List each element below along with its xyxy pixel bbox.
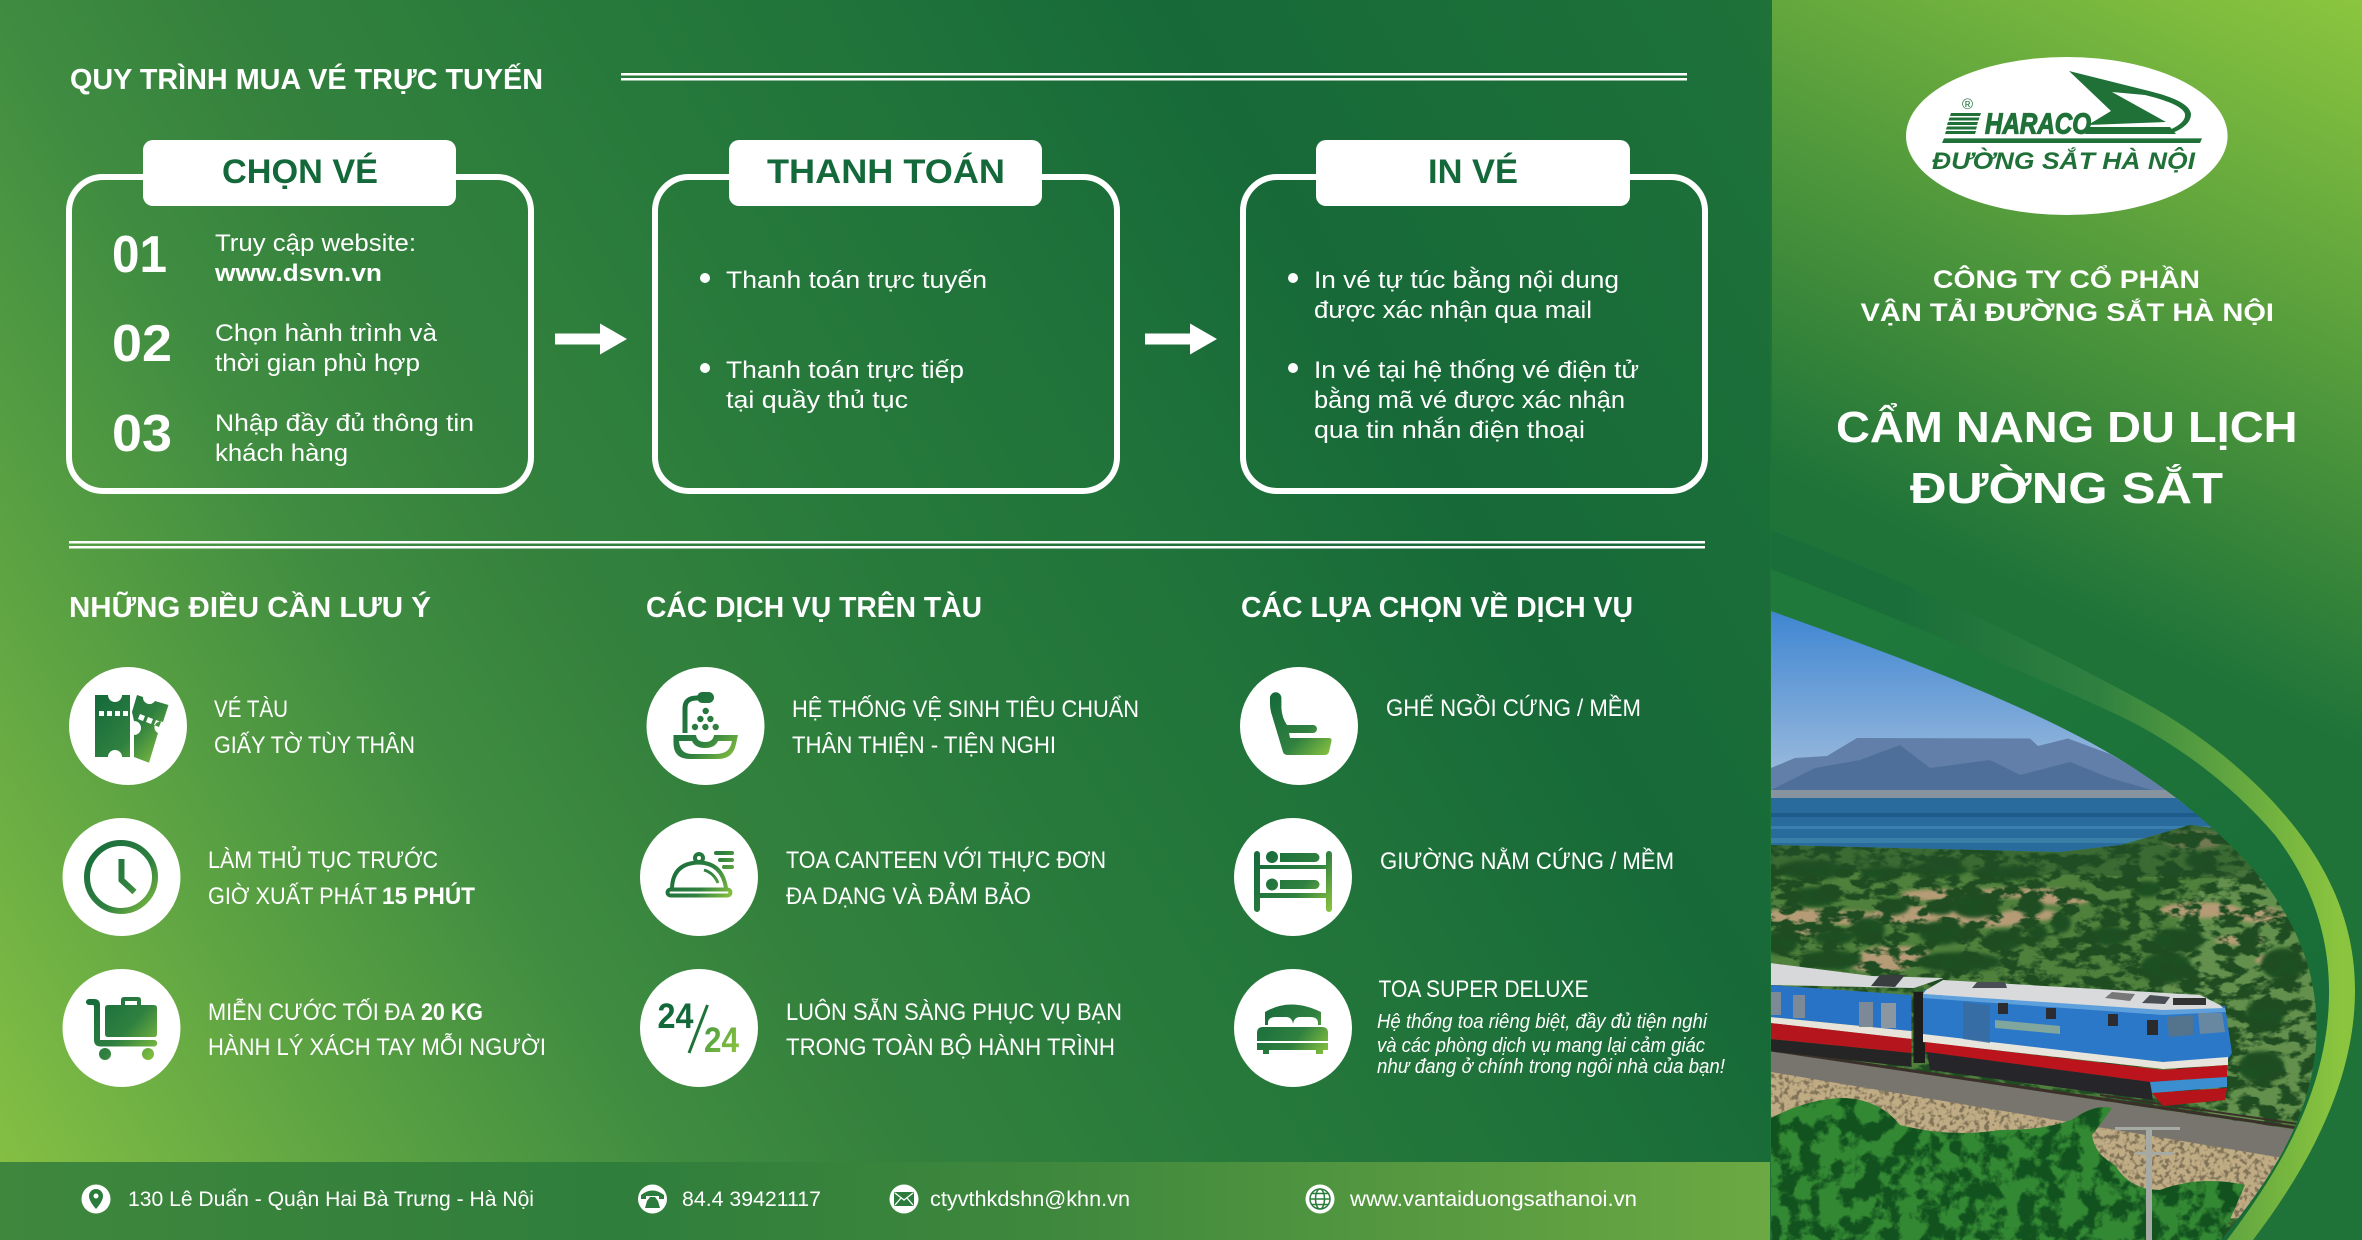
coastal land xyxy=(1771,825,2317,1240)
heading: onboard services: CÁC DỊCH VỤ TRÊN TÀU xyxy=(646,590,982,624)
dark tree clumps xyxy=(1764,853,2305,1083)
company name xyxy=(1860,264,2274,327)
item: hygiene: THÂN THIỆN - TIỆN NGHI xyxy=(792,732,1056,759)
icon: tickets xyxy=(95,695,168,763)
step box: choose ticket xyxy=(69,140,531,491)
icon: seat xyxy=(1270,692,1332,755)
tab: payment: THANH TOÁN xyxy=(767,153,1005,191)
footer: contact bar xyxy=(0,1162,1771,1240)
item: berths: GIƯỜNG NẰM CỨNG / MỀM xyxy=(1380,847,1674,875)
tab: print ticket xyxy=(1316,140,1630,206)
item: 24/24 service: LUÔN SẴN SÀNG PHỤC VỤ BẠN xyxy=(786,998,1122,1026)
item: ticket and ID: VÉ TÀU xyxy=(214,696,288,723)
contact: email: ctyvthkdshn@khn.vn xyxy=(930,1188,1130,1211)
item: baggage allowance: HÀNH LÝ XÁCH TAY MỖI NGƯỜI xyxy=(208,1032,546,1061)
item: hygiene xyxy=(646,667,1139,785)
panel: right cover xyxy=(1760,0,2362,1240)
photo: train along the coast xyxy=(1771,611,2317,1240)
print option: by SMS xyxy=(1288,357,1639,444)
print option: by mail xyxy=(1288,267,1619,324)
logo: Haraco Hanoi Railway: ® xyxy=(1962,96,1973,113)
step 02: Chọn hành trình và xyxy=(215,320,438,347)
contact: address: 130 Lê Duẩn - Quận Hai Bà Trưng - Hà Nội xyxy=(128,1188,534,1211)
item: baggage allowance xyxy=(62,969,546,1087)
arrow: to payment xyxy=(555,324,627,354)
contact: phone xyxy=(638,1184,821,1214)
tab: print ticket: IN VÉ xyxy=(1428,153,1518,191)
company name: CÔNG TY CỔ PHẦN xyxy=(1933,264,2200,294)
item: canteen xyxy=(640,818,1106,936)
column: onboard services xyxy=(640,590,1139,1087)
step 01: Truy cập website: xyxy=(215,230,416,257)
foreground foliage xyxy=(1771,1098,2245,1240)
step 03: 03 xyxy=(112,405,172,463)
icon: bunk bed xyxy=(1254,851,1332,912)
embankment xyxy=(1771,1051,2296,1219)
heading: things to note: NHỮNG ĐIỀU CẦN LƯU Ý xyxy=(69,590,431,624)
item: 24/24 service xyxy=(640,969,1122,1087)
payment option: counter: Thanh toán trực tiếp xyxy=(726,357,964,384)
arrow: to print xyxy=(1145,324,1217,354)
sea xyxy=(1771,798,2271,853)
locomotive xyxy=(1923,980,2232,1106)
item: check-in time: 15 PHÚT xyxy=(382,882,475,910)
panel: online ticket purchase process xyxy=(69,62,1705,491)
contact: phone: 84.4 39421117 xyxy=(682,1188,821,1211)
step 03 xyxy=(112,405,474,467)
icon: 24/24 xyxy=(658,997,739,1060)
item: seats xyxy=(1240,667,1641,785)
item: check-in time: GIỜ XUẤT PHÁT xyxy=(208,882,377,910)
tab: choose ticket xyxy=(143,140,456,206)
icon: double bed xyxy=(1257,1004,1328,1054)
item: baggage allowance: MIỄN CƯỚC TỐI ĐA xyxy=(208,997,415,1026)
icon: food cloche xyxy=(668,853,732,896)
item: berths xyxy=(1234,818,1674,936)
item: super deluxe car: và các phòng dịch vụ mang lại cảm giác xyxy=(1377,1035,1705,1057)
step 02: 02 xyxy=(112,315,172,373)
step 01: 01 xyxy=(112,226,167,284)
step box: print ticket xyxy=(1243,140,1705,491)
utility pole xyxy=(2115,1127,2180,1240)
icon: clock xyxy=(87,843,155,911)
item: seats: GHẾ NGỒI CỨNG / MỀM xyxy=(1386,694,1641,722)
item: super deluxe car: như đang ở chính trong ngôi nhà của bạn! xyxy=(1377,1056,1725,1078)
icon: shower and basin xyxy=(674,692,738,759)
curved light band xyxy=(1771,530,2355,1240)
tan soil patches xyxy=(1760,831,2305,972)
contact: email xyxy=(890,1184,1130,1214)
payment option: counter xyxy=(700,357,964,414)
cover title: ĐƯỜNG SẮT xyxy=(1910,463,2223,513)
print option: by SMS: In vé tại hệ thống vé điện tử xyxy=(1314,357,1639,384)
step 03: khách hàng xyxy=(215,440,348,467)
print option: by SMS: bằng mã vé được xác nhận xyxy=(1314,387,1625,414)
contact: website: www.vantaiduongsathanoi.vn xyxy=(1349,1188,1637,1211)
item: canteen: TOA CANTEEN VỚI THỰC ĐƠN xyxy=(786,847,1106,874)
step 02: thời gian phù hợp xyxy=(215,350,420,377)
item: canteen: ĐA DẠNG VÀ ĐẢM BẢO xyxy=(786,881,1031,910)
print option: by mail: được xác nhận qua mail xyxy=(1314,297,1592,324)
item: super deluxe car: Hệ thống toa riêng biệt, đầy đủ tiện nghi xyxy=(1377,1011,1708,1033)
step 01 xyxy=(112,226,416,287)
logo: Haraco Hanoi Railway: ĐƯỜNG SẮT HÀ NỘI xyxy=(1932,147,2196,175)
tab: payment xyxy=(729,140,1042,206)
heading: service options: CÁC LỰA CHỌN VỀ DỊCH VỤ xyxy=(1241,590,1633,624)
icon: 24/24: 24 xyxy=(658,997,694,1036)
step 02 xyxy=(112,315,438,377)
item: check-in time: LÀM THỦ TỤC TRƯỚC xyxy=(208,845,438,874)
contact: website xyxy=(1306,1184,1637,1214)
item: ticket and ID: GIẤY TỜ TÙY THÂN xyxy=(214,731,415,759)
item: 24/24 service: TRONG TOÀN BỘ HÀNH TRÌNH xyxy=(786,1033,1115,1061)
icon: 24/24: 24 xyxy=(704,1021,739,1060)
left panel background xyxy=(0,0,1771,1240)
column: things to note xyxy=(62,590,546,1087)
train carriage xyxy=(1770,963,1944,1067)
item: baggage allowance: 20 KG xyxy=(421,999,483,1026)
print option: by SMS: qua tin nhắn điện thoại xyxy=(1314,417,1585,444)
step 01: www.dsvn.vn xyxy=(214,260,382,287)
column: service options xyxy=(1234,590,1725,1087)
print option: by mail: In vé tự túc bằng nội dung xyxy=(1314,267,1619,294)
curved dark band xyxy=(1771,569,2329,1240)
icon: luggage cart xyxy=(86,997,157,1060)
logo: Haraco Hanoi Railway: HARACO xyxy=(1985,108,2091,140)
company name: VẬN TẢI ĐƯỜNG SẮT HÀ NỘI xyxy=(1860,297,2274,327)
item: ticket and ID xyxy=(69,667,415,785)
payment option: online: Thanh toán trực tuyến xyxy=(726,267,987,294)
payment option: counter: tại quầy thủ tục xyxy=(726,387,908,414)
item: check-in time xyxy=(62,818,475,936)
heading: online ticket process: QUY TRÌNH MUA VÉ TRỰC TUYẾN xyxy=(70,62,543,96)
cover title: CẨM NANG DU LỊCH xyxy=(1836,401,2298,452)
logo: Haraco Hanoi Railway xyxy=(1906,57,2228,215)
mountains xyxy=(1771,738,2191,800)
step box: payment xyxy=(655,140,1117,491)
item: hygiene: HỆ THỐNG VỆ SINH TIÊU CHUẨN xyxy=(792,695,1139,723)
item: super deluxe car: TOA SUPER DELUXE xyxy=(1378,976,1588,1003)
step 03: Nhập đầy đủ thông tin xyxy=(215,410,474,437)
tab: choose ticket: CHỌN VÉ xyxy=(222,153,378,191)
item: super deluxe car xyxy=(1234,969,1725,1087)
cover title xyxy=(1836,401,2298,513)
